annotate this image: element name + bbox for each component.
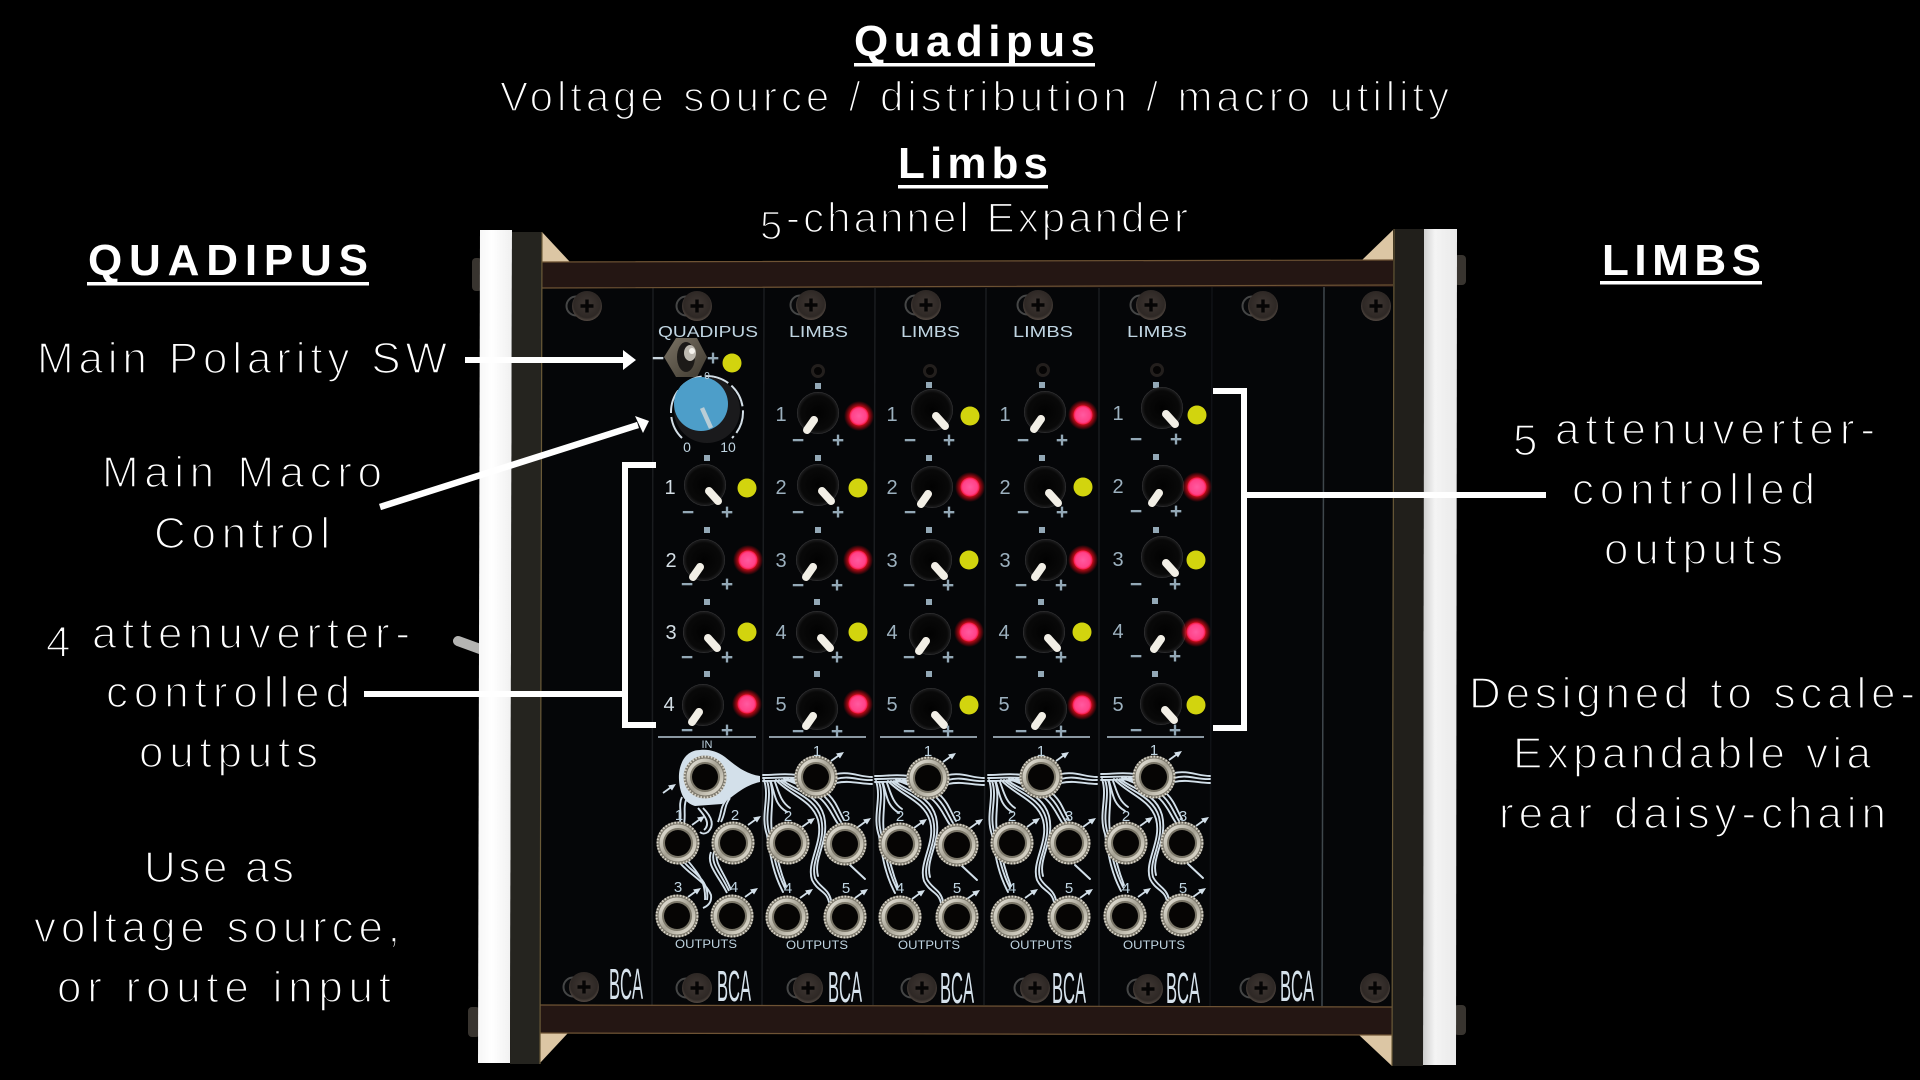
root artwork: quadipus xyxy=(679,750,760,908)
module: LIMBS 3: − xyxy=(1017,501,1029,524)
subtitle: Limbs description: -channel Expander xyxy=(786,194,1188,241)
module: QUADIPUS: 3 xyxy=(674,879,682,896)
module: LIMBS 2: 2 xyxy=(886,477,898,499)
module: LIMBS 1: − xyxy=(792,646,804,669)
module: LIMBS 2: − xyxy=(903,574,915,597)
attenuverter rows xyxy=(663,455,763,742)
attenuverter rows: + xyxy=(721,501,733,524)
label: use as voltage source or route input: Use as xyxy=(144,843,294,892)
module: LIMBS 1: 5 xyxy=(775,694,787,716)
module: QUADIPUS: IN xyxy=(702,739,713,751)
module: QUADIPUS: OUTPUTS xyxy=(675,937,737,951)
right column heading: LIMBS: LIMBS xyxy=(1602,236,1761,285)
module: LIMBS 4: 5 xyxy=(1179,880,1187,897)
module: LIMBS 1: − xyxy=(792,501,804,524)
module: LIMBS 2: OUTPUTS xyxy=(898,938,960,952)
module: LIMBS 3: + xyxy=(1056,501,1068,524)
module: QUADIPUS: QUADIPUS xyxy=(658,324,758,341)
module: LIMBS 2: 1 xyxy=(924,743,932,760)
module: LIMBS 2: 5 xyxy=(886,694,898,716)
module: LIMBS 4: − xyxy=(1130,719,1142,742)
arrow: macro knob xyxy=(380,416,649,507)
module: LIMBS 1: 5 xyxy=(842,880,850,897)
attenuverter rows: + xyxy=(721,573,733,596)
module: LIMBS 2: + xyxy=(942,720,954,743)
module: QUADIPUS: 4 xyxy=(730,879,738,896)
product photo: case with modules xyxy=(458,229,1466,1066)
subtitle: Quadipus description: Voltage source / distribution / macro utility xyxy=(500,73,1449,120)
label: Main Polarity SW: Main Polarity SW xyxy=(37,334,447,383)
module: LIMBS 3: LIMBS xyxy=(1013,324,1073,341)
attenuverter rows: 4 xyxy=(663,694,675,716)
module: LIMBS 4: 1 xyxy=(1112,403,1124,425)
attenuverter rows: − xyxy=(681,646,693,669)
module: LIMBS 3: 5 xyxy=(1065,880,1073,897)
module: LIMBS 1: 1 xyxy=(775,404,787,426)
label: 5 attenuverter-controlled outputs: attenuverter- xyxy=(1555,405,1875,454)
module: LIMBS 4: 3 xyxy=(1179,808,1187,825)
bottom rail xyxy=(540,1005,1392,1035)
main macro blue knob xyxy=(671,371,743,455)
module: LIMBS 3: 4 xyxy=(1008,880,1016,897)
module: LIMBS 1: 3 xyxy=(842,808,850,825)
label: 5 attenuverter-controlled outputs: 5 xyxy=(1513,416,1537,465)
main macro blue knob: 0 xyxy=(683,439,691,455)
module: QUADIPUS: 1 xyxy=(675,807,683,824)
product photo: case with modules: BCA xyxy=(940,964,974,1013)
attenuverter rows: 3 xyxy=(665,622,677,644)
module: LIMBS 1: − xyxy=(792,574,804,597)
label: 5 attenuverter-controlled outputs: outputs xyxy=(1604,525,1783,574)
jacks xyxy=(656,756,754,938)
module: LIMBS 2: + xyxy=(943,429,955,452)
module: LIMBS 2 xyxy=(875,290,985,1013)
module: LIMBS 1: LIMBS xyxy=(789,324,848,341)
module: LIMBS 4: OUTPUTS xyxy=(1123,938,1185,952)
black side rails xyxy=(510,229,1424,1066)
module: LIMBS 4: − xyxy=(1130,645,1142,668)
polarity toggle switch xyxy=(664,338,707,377)
label: Main Macro Control xyxy=(102,448,382,558)
label: 5 attenuverter-controlled outputs: controlled xyxy=(1572,465,1815,514)
module dividers xyxy=(652,286,1324,1006)
module: LIMBS 3: 3 xyxy=(999,550,1011,572)
module: LIMBS 4 xyxy=(1101,290,1212,1013)
module: LIMBS 4: 1 xyxy=(1150,742,1158,759)
module: LIMBS 3: − xyxy=(1015,646,1027,669)
module: LIMBS 2: 5 xyxy=(953,880,961,897)
label: 4 attenuverter-controlled outputs: controlled xyxy=(106,668,350,717)
module: LIMBS 1 xyxy=(763,290,874,1012)
module: LIMBS 4: 2 xyxy=(1122,808,1130,825)
main macro blue knob: 10 xyxy=(720,439,736,455)
module: LIMBS 3: − xyxy=(1015,574,1027,597)
module: LIMBS 4: + xyxy=(1170,500,1182,523)
attenuverter rows: − xyxy=(682,501,694,524)
module: LIMBS 2: + xyxy=(943,501,955,524)
module: LIMBS 1: OUTPUTS xyxy=(786,938,848,952)
label: designed to scale, expandable via rear daisy-chain: Designed to scale- xyxy=(1469,669,1915,718)
module: QUADIPUS: BCA xyxy=(717,962,751,1011)
blank modules: right: BCA xyxy=(1280,962,1314,1011)
module: QUADIPUS: 2 xyxy=(731,807,739,824)
module: LIMBS 4: 4 xyxy=(1112,621,1124,643)
module: LIMBS 2: + xyxy=(942,646,954,669)
small jack arrows xyxy=(663,784,761,897)
panel background xyxy=(540,285,1393,1007)
module: LIMBS 1: 2 xyxy=(775,477,787,499)
module: LIMBS 3: + xyxy=(1056,429,1068,452)
label: designed to scale, expandable via rear daisy-chain: rear daisy-chain xyxy=(1499,789,1886,838)
module: LIMBS 3: 5 xyxy=(998,694,1010,716)
blank module: left xyxy=(564,291,643,1009)
attenuverter rows: 2 xyxy=(665,550,677,572)
product photo: case with modules: BCA xyxy=(609,960,643,1009)
module: LIMBS 3: 3 xyxy=(1065,808,1073,825)
side screws xyxy=(468,255,1466,1037)
module: LIMBS 2: − xyxy=(903,720,915,743)
module: LIMBS 2: 1 xyxy=(886,404,898,426)
module: LIMBS 4: − xyxy=(1130,573,1142,596)
arrow: polarity switch xyxy=(465,350,636,370)
module: LIMBS 3: + xyxy=(1055,720,1067,743)
module: LIMBS 1: + xyxy=(832,501,844,524)
module: LIMBS 2: 3 xyxy=(953,808,961,825)
module: QUADIPUS: + xyxy=(707,347,719,370)
module: LIMBS 4: 5 xyxy=(1112,694,1124,716)
blank modules: right xyxy=(1240,291,1391,1011)
module: LIMBS 1: 3 xyxy=(775,550,787,572)
label: 5 attenuverter-controlled outputs xyxy=(1513,405,1875,574)
white side panels xyxy=(478,229,1457,1065)
label: 4 attenuverter-controlled outputs xyxy=(46,609,410,777)
module: LIMBS 1: 4 xyxy=(775,622,787,644)
module: LIMBS 3: − xyxy=(1015,720,1027,743)
module: LIMBS 4: LIMBS xyxy=(1127,324,1187,341)
module: LIMBS 2: + xyxy=(942,574,954,597)
module: LIMBS 1: − xyxy=(792,720,804,743)
module: LIMBS 4: + xyxy=(1170,428,1182,451)
module: LIMBS 3: − xyxy=(1017,429,1029,452)
module: LIMBS 3: OUTPUTS xyxy=(1010,938,1072,952)
module: LIMBS 3: + xyxy=(1055,574,1067,597)
module: LIMBS 1: 1 xyxy=(813,743,821,760)
left column heading: QUADIPUS: QUADIPUS xyxy=(88,236,368,285)
module: LIMBS 1: + xyxy=(831,574,843,597)
module: LIMBS 2: − xyxy=(904,429,916,452)
module: LIMBS 4: 3 xyxy=(1112,549,1124,571)
label: designed to scale, expandable via rear daisy-chain xyxy=(1469,669,1915,838)
bracket: limbs outputs xyxy=(1213,388,1546,731)
module: LIMBS 2: − xyxy=(903,646,915,669)
module: LIMBS 1: + xyxy=(831,720,843,743)
module: LIMBS 1: BCA xyxy=(828,963,862,1012)
label: designed to scale, expandable via rear daisy-chain: Expandable via xyxy=(1513,729,1872,778)
label: 4 attenuverter-controlled outputs: attenuverter- xyxy=(92,609,410,658)
main macro blue knob: 0 xyxy=(704,371,710,382)
label: use as voltage source or route input: or route input xyxy=(57,963,391,1012)
module: LIMBS 2: LIMBS xyxy=(901,324,960,341)
top rail xyxy=(542,260,1393,288)
bracket: quadipus outputs xyxy=(364,462,656,728)
attenuverter rows: + xyxy=(721,719,733,742)
module: LIMBS 1: 2 xyxy=(784,808,792,825)
module: LIMBS 4: BCA xyxy=(1166,964,1200,1013)
module: LIMBS 3 xyxy=(988,290,1098,1013)
module: LIMBS 1: + xyxy=(831,646,843,669)
subtitle: Limbs description: 5 xyxy=(760,204,782,248)
attenuverter rows: − xyxy=(681,719,693,742)
title: Limbs: Limbs xyxy=(898,139,1048,188)
module: LIMBS 2: − xyxy=(904,501,916,524)
module: LIMBS 3: 4 xyxy=(998,622,1010,644)
module: LIMBS 3: 2 xyxy=(999,477,1011,499)
module: LIMBS 2: 2 xyxy=(896,808,904,825)
module: LIMBS 3: + xyxy=(1055,646,1067,669)
module: LIMBS 1: 4 xyxy=(784,880,792,897)
module: LIMBS 2: 4 xyxy=(896,880,904,897)
attenuverter rows: − xyxy=(681,573,693,596)
label: use as voltage source or route input xyxy=(34,843,400,1012)
label: 4 attenuverter-controlled outputs: outputs xyxy=(139,728,318,777)
module: LIMBS 4: + xyxy=(1169,719,1181,742)
module: QUADIPUS: − xyxy=(652,347,664,370)
module: LIMBS 3: 2 xyxy=(1008,808,1016,825)
module: LIMBS 4: 4 xyxy=(1122,880,1130,897)
module: LIMBS 3: 1 xyxy=(999,404,1011,426)
module: LIMBS 3: 1 xyxy=(1037,743,1045,760)
label: Main Macro Control: Main Macro xyxy=(102,448,382,497)
module: LIMBS 4: − xyxy=(1130,500,1142,523)
module: LIMBS 1: + xyxy=(832,429,844,452)
label: 4 attenuverter-controlled outputs: 4 xyxy=(46,618,70,667)
module: LIMBS 3: BCA xyxy=(1052,964,1086,1013)
label: Main Macro Control: Control xyxy=(154,509,330,558)
module: LIMBS 4: 2 xyxy=(1112,476,1124,498)
module: LIMBS 1: − xyxy=(792,429,804,452)
module: LIMBS 4: + xyxy=(1169,645,1181,668)
title: Quadipus: Quadipus xyxy=(854,17,1095,66)
module: LIMBS 2: 4 xyxy=(886,622,898,644)
wooden corner triangles xyxy=(540,230,1393,1066)
module: LIMBS 4: + xyxy=(1169,573,1181,596)
module: LIMBS 4: − xyxy=(1130,428,1142,451)
module: LIMBS 2: 3 xyxy=(886,550,898,572)
attenuverter rows: 1 xyxy=(664,477,676,499)
attenuverter rows: + xyxy=(721,646,733,669)
label: use as voltage source or route input: voltage source, xyxy=(34,903,400,952)
module: QUADIPUS xyxy=(652,291,763,1011)
rear toggle lever xyxy=(458,641,480,649)
